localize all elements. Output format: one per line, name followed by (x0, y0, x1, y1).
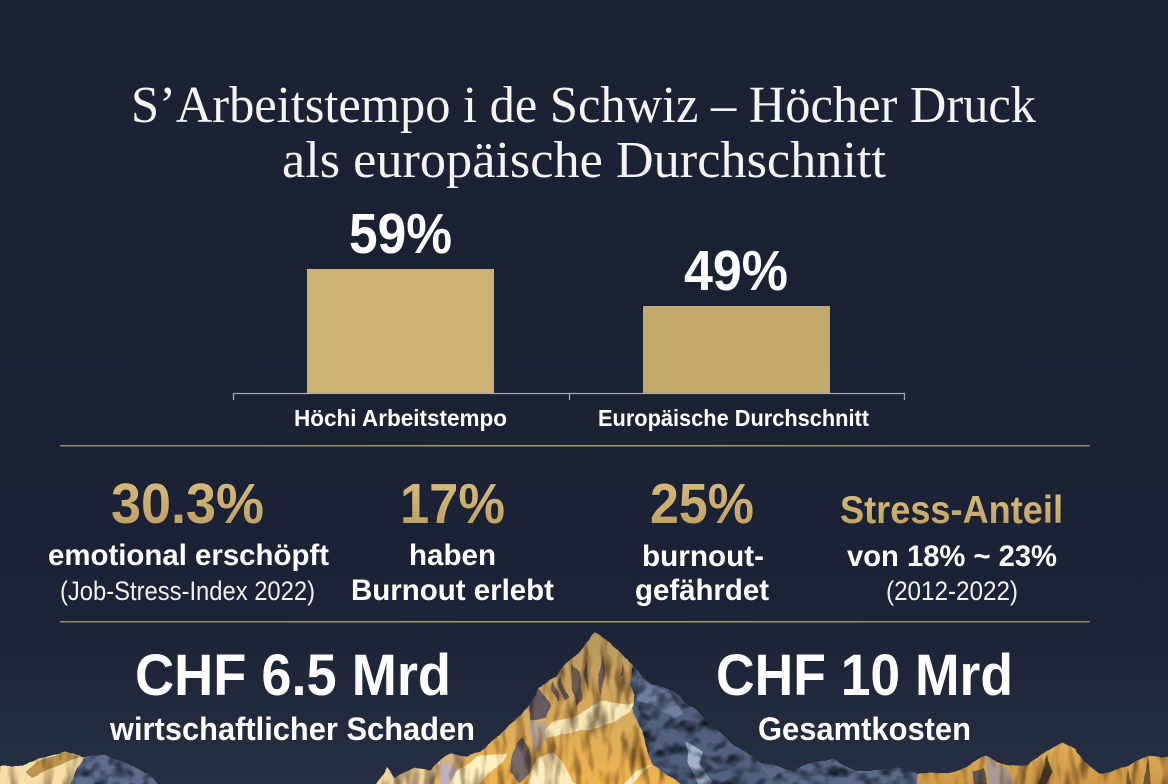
axis (234, 394, 904, 400)
cost: CHF 10 Mrd (716, 643, 1013, 747)
bar: Höchi Arbeitstempo 59%: Höchi Arbeitstempo (294, 405, 507, 431)
stat: Stress-Anteil: Stress-Anteil (840, 489, 1063, 532)
cost: CHF 6.5 Mrd (109, 643, 475, 747)
stat: 25% burnout-gefährdet: 25% (650, 472, 754, 536)
mountain: left ridge (0, 751, 163, 784)
bar: Europäische Durchschnitt 49%: 49% (684, 239, 788, 303)
cost: CHF 10 Mrd: CHF 10 Mrd (716, 643, 1013, 708)
stat: 30.3% emotional erschöpft: emotional erschöpft (48, 539, 329, 572)
stat: 30.3% emotional erschöpft: (Job-Stress-Index 2022) (60, 576, 315, 606)
bar: Europäische Durchschnitt 49% (598, 239, 869, 431)
stat: 30.3% emotional erschöpft: 30.3% (111, 472, 264, 536)
stat: 25% burnout-gefährdet: burnout- (642, 540, 764, 573)
sunlit face (433, 632, 687, 784)
snow band (545, 700, 633, 738)
stat: 17% haben Burnout erlebt: haben (409, 539, 496, 572)
title: als europäische Durchschnitt (282, 132, 887, 189)
bar: Höchi Arbeitstempo 59% (294, 202, 507, 431)
shadow face (630, 665, 777, 784)
stat: Stress-Anteil (840, 489, 1063, 606)
mountain: main peak (433, 632, 777, 784)
cost: CHF 6.5 Mrd: CHF 6.5 Mrd (135, 643, 451, 708)
stat: Stress-Anteil: (2012-2022) (886, 576, 1018, 606)
stat: 25% burnout-gefährdet (635, 472, 769, 607)
mountain: far right ridge (760, 742, 1168, 784)
title (131, 77, 1036, 189)
mountain range (0, 632, 1168, 784)
stat: 17% haben Burnout erlebt: Burnout erlebt (351, 574, 554, 607)
bar: Europäische Durchschnitt 49%: Europäische Durchschnitt (598, 405, 869, 431)
title: S’Arbeitstempo i de Schwiz – Höcher Druck (131, 77, 1036, 134)
stat: Stress-Anteil: von 18% ~ 23% (847, 540, 1057, 573)
cost: CHF 10 Mrd: Gesamtkosten (758, 711, 971, 747)
stat: 17% haben Burnout erlebt: 17% (400, 472, 505, 536)
stat: 17% haben Burnout erlebt (351, 472, 554, 607)
bar: Höchi Arbeitstempo 59%: 59% (349, 202, 452, 266)
cost: CHF 6.5 Mrd: wirtschaftlicher Schaden (109, 711, 475, 747)
mountain: foothill left of peak (372, 755, 470, 784)
sunlit snow slopes (450, 753, 507, 784)
stat: 30.3% emotional erschöpft (48, 472, 329, 606)
bar chart (234, 202, 904, 431)
stat: 25% burnout-gefährdet: gefährdet (635, 574, 769, 607)
rock shadows (552, 655, 623, 707)
